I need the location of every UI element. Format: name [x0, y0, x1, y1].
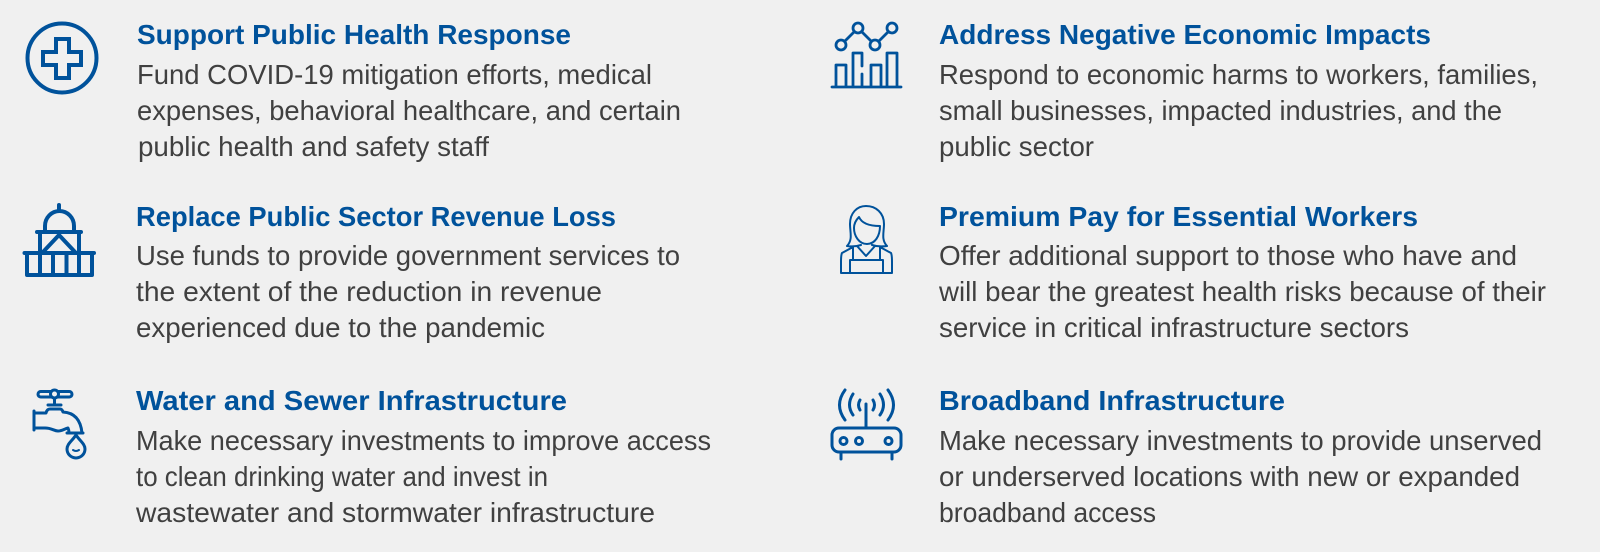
- text: economic impacts description: public sector: [939, 131, 1094, 162]
- text: premium pay description: [938, 240, 1546, 343]
- text: revenue loss description: the extent of the reduction in revenue: [136, 276, 602, 307]
- heading: replace public sector revenue loss: Replace Public Sector Revenue Loss: [136, 201, 616, 232]
- panel: replace public sector revenue loss: [24, 201, 680, 343]
- icon: medical cross: [28, 24, 96, 92]
- text: premium pay description: will bear the greatest health risks because of their: [938, 276, 1546, 307]
- icon: wireless router: [832, 390, 901, 459]
- text: broadband description: or underserved locations with new or expanded: [939, 461, 1520, 492]
- text: revenue loss description: Use funds to provide government services to: [136, 240, 680, 271]
- icon: capitol building: [24, 205, 94, 275]
- text: water infrastructure description: wastewater and stormwater infrastructure: [135, 497, 655, 528]
- text: public health description: expenses, behavioral healthcare, and certain: [137, 95, 681, 126]
- icon: bar and line chart: [832, 23, 901, 87]
- heading: water and sewer infrastructure: Water and Sewer Infrastructure: [136, 385, 567, 416]
- text: economic impacts description: small businesses, impacted industries, and the: [939, 95, 1502, 126]
- text: public health description: Fund COVID-19 mitigation efforts, medical: [137, 59, 652, 90]
- text: broadband description: [939, 425, 1542, 528]
- text: premium pay description: Offer additional support to those who have and: [939, 240, 1517, 271]
- text: revenue loss description: experienced due to the pandemic: [136, 312, 545, 343]
- panel: support public health response: [28, 19, 681, 162]
- text: water infrastructure description: [135, 425, 711, 528]
- text: public health description: [137, 59, 681, 162]
- heading: address negative economic impacts: Address Negative Economic Impacts: [939, 19, 1431, 50]
- text: water infrastructure description: Make necessary investments to improve access: [136, 425, 711, 456]
- text: revenue loss description: [136, 240, 680, 343]
- heading: premium pay for essential workers: Premium Pay for Essential Workers: [939, 201, 1418, 232]
- text: public health description: public health and safety staff: [138, 131, 489, 162]
- text: economic impacts description: [939, 59, 1538, 162]
- icon: essential worker: [841, 206, 892, 273]
- text: broadband description: Make necessary investments to provide unserved: [939, 425, 1542, 456]
- text: water infrastructure description: to clean drinking water and invest in: [136, 461, 548, 492]
- text: premium pay description: service in critical infrastructure sectors: [939, 312, 1409, 343]
- panel: broadband infrastructure: [832, 385, 1542, 528]
- panel: premium pay for essential workers: [841, 201, 1546, 343]
- icon: water faucet with drop: [34, 390, 85, 458]
- heading: broadband infrastructure: Broadband Infrastructure: [939, 385, 1285, 416]
- text: economic impacts description: Respond to economic harms to workers, families,: [939, 59, 1538, 90]
- heading: support public health response: Support Public Health Response: [137, 19, 571, 50]
- panel: address negative economic impacts: [832, 19, 1538, 162]
- text: broadband description: broadband access: [939, 497, 1156, 528]
- panel: water and sewer infrastructure: [34, 385, 711, 528]
